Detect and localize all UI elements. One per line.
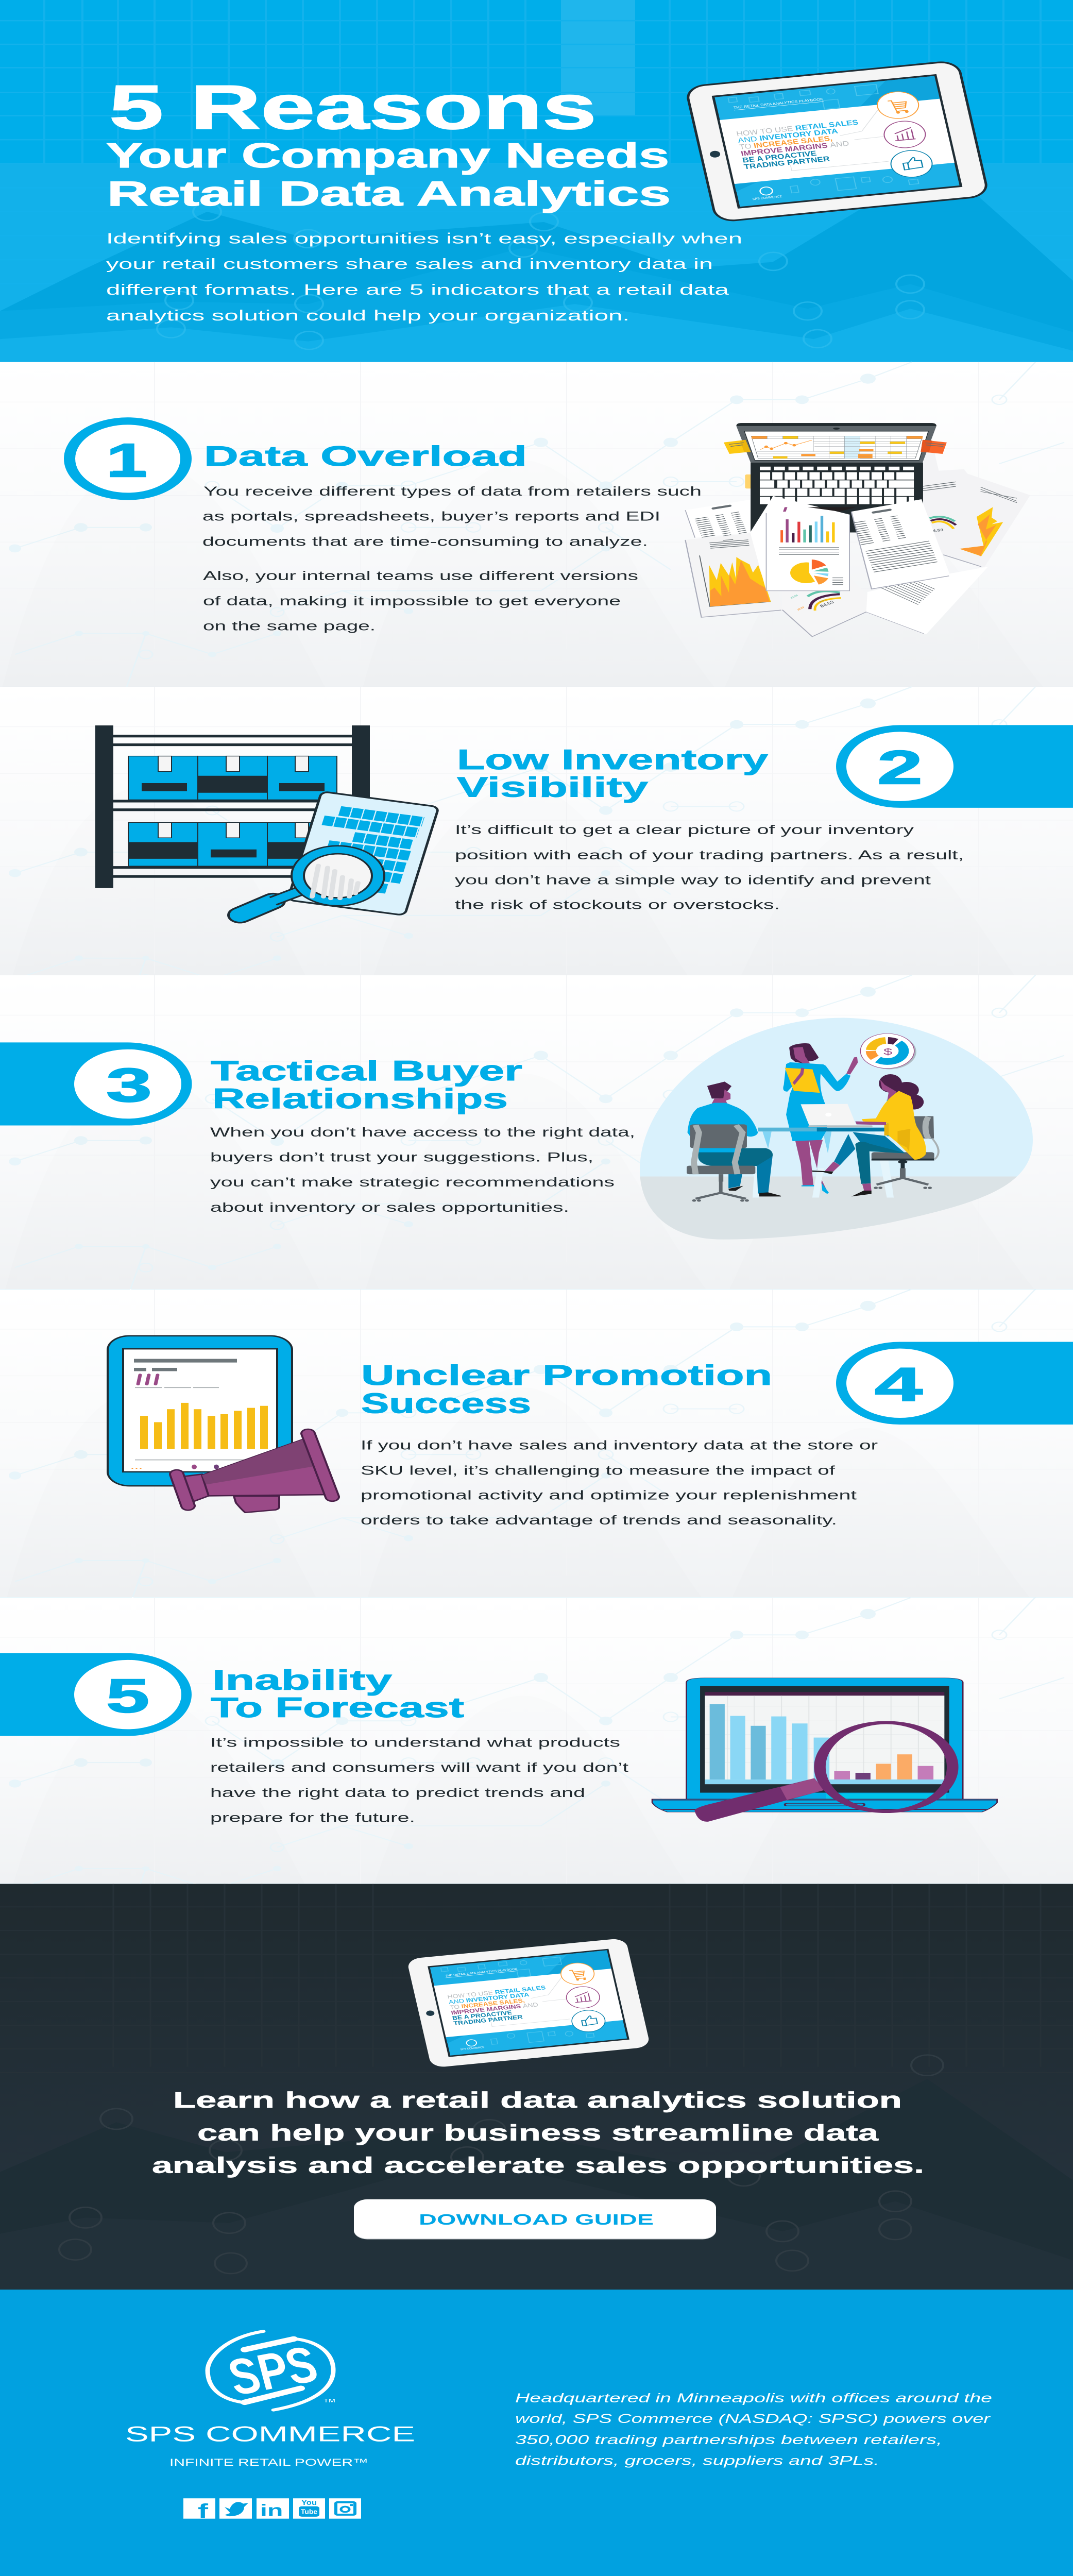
icon: tablet with playbook cover: IMPROVE MARGINS AND — [451, 2002, 539, 2016]
illustration: laptop and scattered reports: 22.53 — [790, 595, 799, 599]
body text: you don’t have a simple way to identify and prevent — [455, 873, 931, 887]
icon: tablet with playbook cover: THE RETAIL DATA ANALYTICS PLAYBOOK — [733, 97, 824, 110]
panel: reason 2 low inventory visibility — [0, 687, 1073, 1020]
intro text: different formats. Here are 5 indicators that a retail data — [106, 281, 729, 298]
call to action heading: can help your business streamline data — [197, 2120, 879, 2145]
title: Your Company Needs — [106, 136, 669, 175]
body text — [361, 1438, 878, 1527]
icon: tablet with playbook cover: TO INCREASE SALES, — [739, 134, 833, 151]
panel: reason 5 inability to forecast — [0, 1597, 1073, 1930]
heading — [211, 1055, 522, 1114]
body text: If you don’t have sales and inventory data at the store or — [361, 1438, 878, 1452]
body text: have the right data to predict trends and — [210, 1785, 585, 1800]
body text: position with each of your trading partners. As a result, — [455, 848, 964, 862]
button: download guide: DOWNLOAD GUIDE — [419, 2211, 654, 2228]
body text: promotional activity and optimize your replenishment — [361, 1488, 857, 1502]
body text: It’s difficult to get a clear picture of your inventory — [455, 823, 914, 837]
call to action heading — [152, 2088, 924, 2178]
icon: tablet with playbook cover: HOW TO USE RETAIL SALES — [736, 118, 859, 138]
heading — [211, 1664, 464, 1723]
number badge 1 — [70, 421, 186, 497]
heading: Success — [361, 1387, 531, 1419]
panel: call to action — [0, 1884, 1073, 2290]
illustration: inventory rack and magnifier — [95, 725, 439, 916]
panel: reason 1 data overload — [0, 362, 1073, 696]
number badge 3: 3 — [106, 1058, 152, 1112]
heading: Data Overload — [204, 440, 527, 471]
heading: Unclear Promotion — [361, 1360, 772, 1391]
heading: To Forecast — [211, 1692, 464, 1723]
title: 5 Reasons — [109, 73, 597, 142]
body text: buyers don’t trust your suggestions. Plus, — [210, 1150, 593, 1164]
number badge 4 — [836, 1342, 1073, 1425]
logo: SPS Commerce: SPS COMMERCE — [125, 2422, 415, 2446]
social icons: You — [301, 2499, 317, 2506]
icon: tablet with playbook cover: SPS COMMERCE — [460, 2046, 485, 2051]
body text — [210, 1735, 628, 1825]
icon: tablet with playbook cover — [686, 61, 989, 222]
chart badge: $ — [883, 1047, 892, 1057]
heading — [361, 1360, 772, 1419]
icon: tablet with playbook cover: HOW TO USE RETAIL SALES — [447, 1985, 546, 2001]
button: download guide — [354, 2199, 716, 2239]
panel: hero — [0, 0, 1073, 362]
icon: tablet with playbook cover: BE A PROACTIVE — [742, 149, 817, 164]
body text: orders to take advantage of trends and seasonality. — [361, 1513, 837, 1527]
illustration: laptop with magnifier — [652, 1678, 997, 1822]
heading: Inability — [212, 1664, 392, 1696]
body text: prepare for the future. — [210, 1810, 415, 1825]
company description: 350,000 trading partnerships between retailers, — [515, 2432, 942, 2447]
logo: SPS Commerce: TM — [323, 2398, 335, 2403]
call to action heading: Learn how a retail data analytics solution — [173, 2088, 902, 2113]
body text: on the same page. — [203, 619, 376, 633]
illustration: laptop and scattered reports: 84.53 — [819, 600, 836, 608]
panel: reason 4 unclear promotion success — [0, 1289, 1073, 1622]
social icons: f — [198, 2500, 208, 2522]
body text: Also, your internal teams use different versions — [203, 569, 638, 583]
number badge 5 — [0, 1653, 192, 1736]
illustration: laptop and scattered reports — [685, 423, 1030, 637]
body text: as portals, spreadsheets, buyer’s reports and EDI — [202, 509, 660, 523]
panel: footer — [0, 2290, 1073, 2575]
company description — [515, 2391, 992, 2468]
number badge 2: 2 — [877, 741, 923, 794]
intro text: your retail customers share sales and inventory data in — [106, 256, 713, 272]
body text: documents that are time-consuming to analyze. — [202, 534, 648, 549]
social icons: in — [260, 2501, 283, 2519]
icon: tablet with playbook cover — [406, 1938, 651, 2068]
body text: SKU level, it’s challenging to measure the impact of — [361, 1463, 835, 1478]
body text — [210, 1125, 635, 1215]
illustration: team meeting — [634, 1013, 1046, 1243]
social icons: Tube — [301, 2508, 317, 2516]
title — [106, 73, 671, 213]
illustration: laptop and scattered reports: TOTAL — [819, 599, 828, 603]
logo: SPS Commerce: INFINITE RETAIL POWER™ — [169, 2457, 368, 2468]
illustration: phone and megaphone — [108, 1336, 335, 1513]
number badge 2 — [836, 725, 1073, 808]
illustration: laptop and scattered reports: 4.53 — [932, 528, 944, 533]
company description: world, SPS Commerce (NASDAQ: SPSC) powers over — [515, 2412, 991, 2426]
call to action heading: analysis and accelerate sales opportunities. — [152, 2153, 924, 2178]
icon: tablet with playbook cover: TRADING PARTNER — [743, 155, 830, 171]
icon: tablet with playbook cover: IMPROVE MARGINS AND — [740, 139, 850, 158]
icon: tablet with playbook cover: BE A PROACTIVE — [452, 2010, 513, 2022]
icon: tablet with playbook cover: AND INVENTORY DATA — [448, 1992, 530, 2006]
number badge 5: 5 — [106, 1669, 149, 1722]
intro text — [106, 230, 742, 324]
intro text: Identifying sales opportunities isn’t easy, especially when — [106, 230, 742, 247]
body text: you can’t make strategic recommendations — [210, 1175, 615, 1189]
illustration: laptop and scattered reports: 29.97 — [796, 606, 805, 611]
heading — [457, 744, 768, 803]
heading: Low Inventory — [457, 744, 768, 775]
title: Retail Data Analytics — [107, 175, 671, 213]
body text: You receive different types of data from retailers such — [203, 484, 702, 499]
icon: tablet with playbook cover: SPS COMMERCE — [752, 194, 782, 201]
chart badge — [860, 1033, 916, 1069]
logo: SPS Commerce — [125, 2331, 415, 2468]
intro text: analytics solution could help your organization. — [106, 307, 629, 324]
icon: tablet with playbook cover: THE RETAIL DATA ANALYTICS PLAYBOOK — [445, 1968, 518, 1977]
social icons — [183, 2498, 361, 2522]
icon: tablet with playbook cover: AND INVENTORY DATA — [737, 127, 839, 144]
number badge 4: 4 — [875, 1358, 923, 1411]
body text: of data, making it impossible to get everyone — [203, 594, 621, 608]
body text — [202, 484, 702, 633]
company description: distributors, grocers, suppliers and 3PLs. — [515, 2453, 879, 2468]
body text: the risk of stockouts or overstocks. — [455, 897, 780, 912]
logo: SPS Commerce: SPS — [218, 2336, 327, 2405]
body text: When you don’t have access to the right data, — [210, 1125, 635, 1139]
icon: tablet with playbook cover: TRADING PARTNER — [453, 2014, 523, 2027]
body text: It’s impossible to understand what products — [210, 1735, 620, 1750]
icon: tablet with playbook cover: TO INCREASE SALES, — [449, 1997, 525, 2011]
heading: Visibility — [457, 771, 648, 803]
body text: about inventory or sales opportunities. — [210, 1200, 569, 1215]
body text: retailers and consumers will want if you don’t — [210, 1760, 628, 1775]
heading: Tactical Buyer — [211, 1055, 522, 1087]
body text — [455, 823, 964, 912]
heading: Relationships — [212, 1083, 508, 1114]
panel: reason 3 tactical buyer relationships — [0, 975, 1073, 1309]
company description: Headquartered in Minneapolis with offices around the — [515, 2391, 992, 2405]
number badge 3 — [0, 1042, 192, 1126]
number badge 1: 1 — [106, 434, 147, 487]
